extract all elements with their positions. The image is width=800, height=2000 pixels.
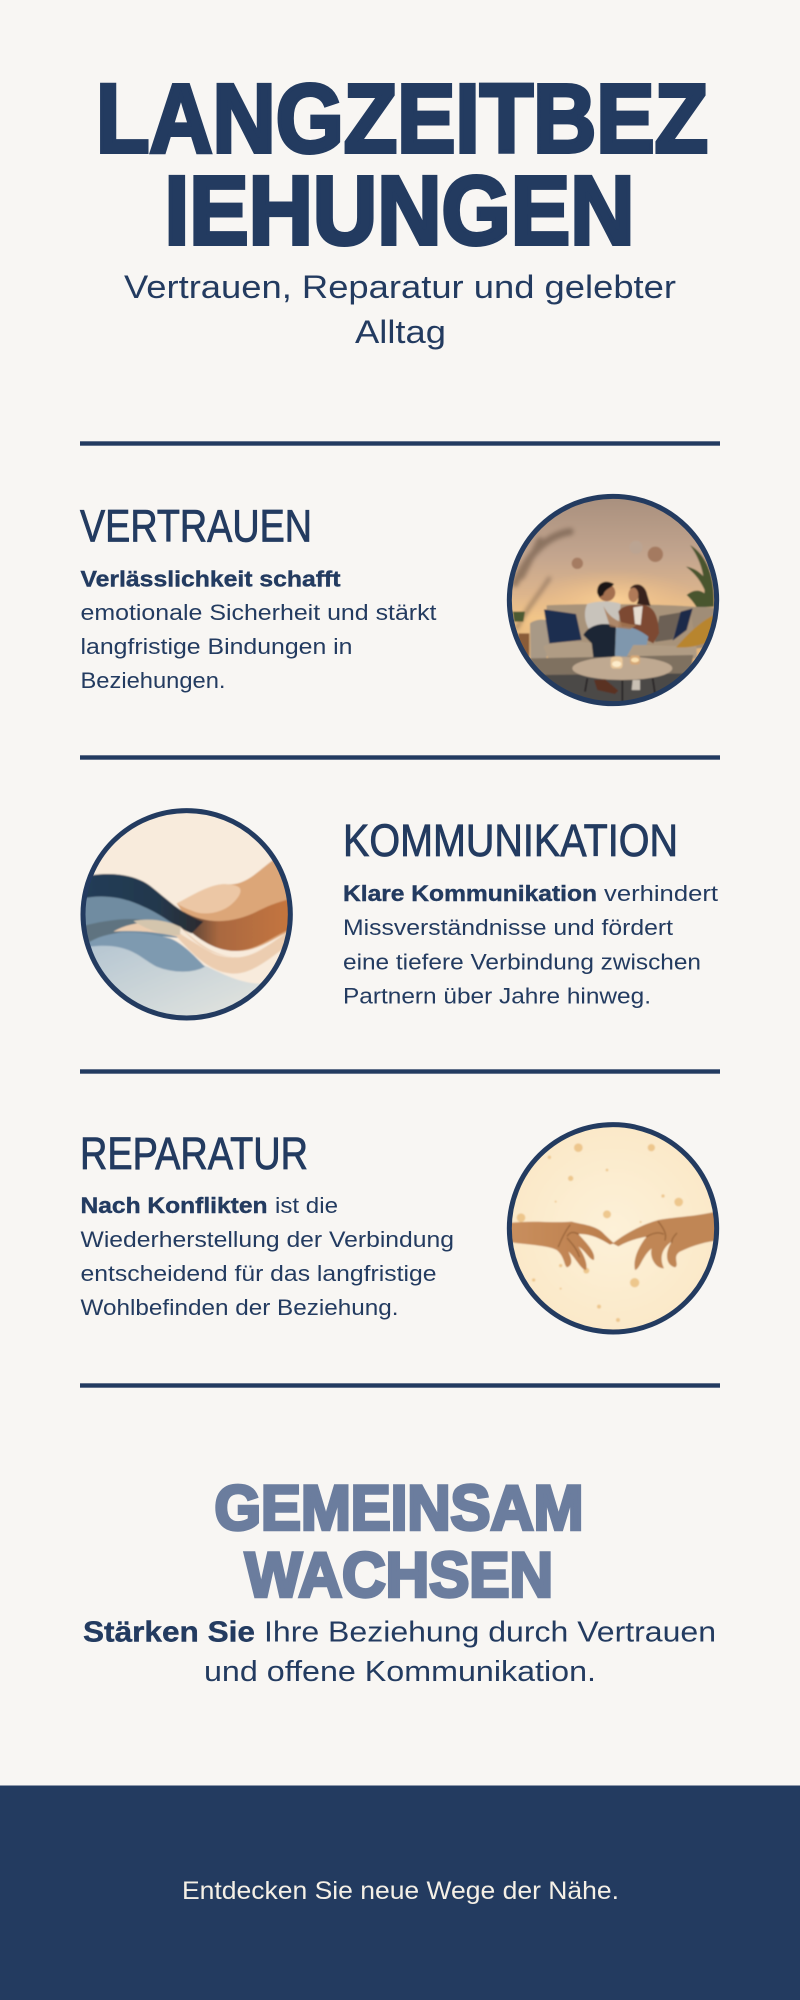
text block: Vertrauen: emotionale Sicherheit und stärkt [80,600,436,625]
panel: Kommunikation [77,802,718,1028]
closing heading: WACHSEN [245,1540,553,1610]
text block: Reparatur: ist die [275,1193,338,1218]
closing text: Ihre Beziehung durch Vertrauen [264,1616,716,1648]
text block: Reparatur: Wohlbefinden der Beziehung. [80,1295,398,1320]
closing text: und offene Kommunikation. [204,1656,596,1688]
text block: Kommunikation: Partnern über Jahre hinweg. [343,984,651,1008]
subtitle [124,269,676,350]
heading: Vertrauen: VERTRAUEN [80,500,312,552]
text block: Vertrauen: Beziehungen. [80,668,226,693]
text block: Vertrauen: Verlässlichkeit schafft [80,566,341,592]
text block: Vertrauen [80,566,436,693]
text block: Reparatur [80,1193,454,1320]
image: abstract waves [80,808,293,1020]
title: LANGZEITBEZ [96,64,708,173]
title: IEHUNGEN [164,156,634,265]
panel: Vertrauen [80,490,723,710]
heading: Reparatur: REPARATUR [80,1128,308,1179]
text block: Reparatur: Nach Konflikten [80,1193,268,1218]
subtitle: Alltag [355,314,446,350]
text block: Kommunikation: Missverständnisse und fördert [343,915,673,940]
footer band [0,1786,800,2000]
image: reaching hands [503,1120,723,1340]
text block: Vertrauen: langfristige Bindungen in [80,634,352,659]
text block: Kommunikation [343,881,718,1008]
title [96,64,708,265]
text block: Reparatur: entscheidend für das langfristige [80,1261,436,1286]
closing text: Stärken Sie [83,1616,255,1648]
text block: Reparatur: Wiederherstellung der Verbindung [80,1227,454,1252]
closing heading [214,1474,584,1610]
text block: Kommunikation: Klare Kommunikation [343,881,597,906]
panel: Reparatur [80,1120,723,1340]
text block: Kommunikation: verhindert [604,881,718,906]
closing text [83,1616,716,1688]
text block: Kommunikation: eine tiefere Verbindung zwischen [343,950,701,974]
image: couple on sofa [503,490,723,710]
footer text: Entdecken Sie neue Wege der Nähe. [182,1877,619,1905]
heading: Kommunikation: KOMMUNIKATION [343,815,678,866]
subtitle: Vertrauen, Reparatur und gelebter [124,269,676,305]
closing heading: GEMEINSAM [214,1474,584,1544]
